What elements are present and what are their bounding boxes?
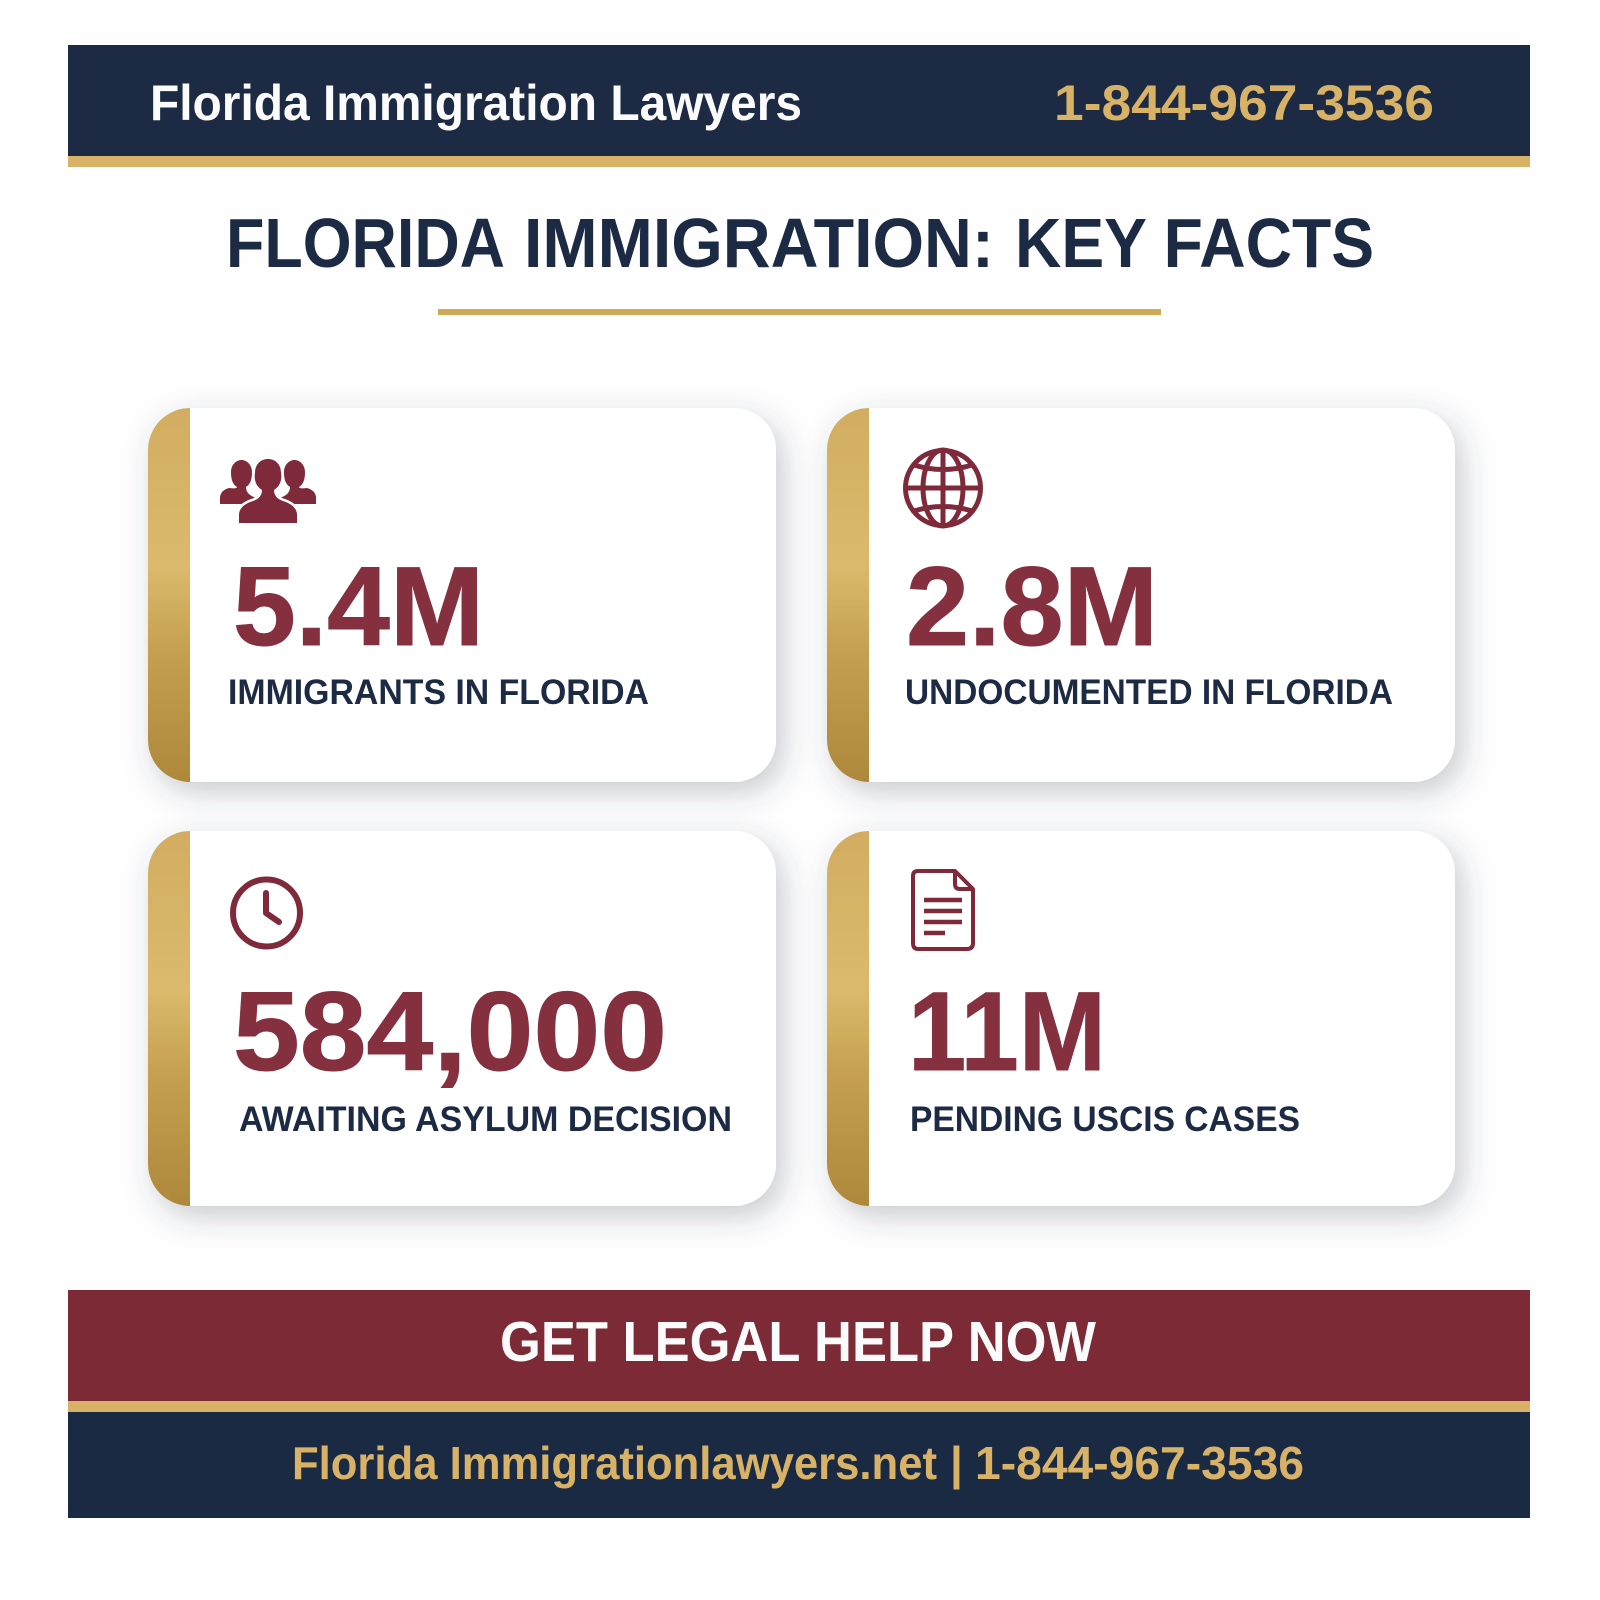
title underline [438,309,1161,315]
icon: document [913,871,973,949]
call to action banner [68,1290,1530,1401]
icon: globe [905,450,981,526]
stat value: 2.8M [906,544,1158,669]
stat value: 584,000 [233,969,667,1094]
stat label: UNDOCUMENTED IN FLORIDA [905,673,1393,712]
title: IMMIGRATION: [524,204,994,282]
firm name: Florida Immigration Lawyers [150,75,802,131]
title: KEY FACTS [1015,204,1374,282]
footer website and phone: 1-844-967-3536 [975,1437,1304,1489]
panel: pending USCIS cases [827,831,1455,1206]
stat value: 11M [908,969,1106,1094]
stat label: AWAITING ASYLUM DECISION [239,1100,732,1139]
header phone number: 1-844-967-3536 [1054,75,1434,131]
icon: clock [233,880,300,946]
stat label: IMMIGRANTS IN FLORIDA [228,673,649,712]
icon: group of people [220,459,316,523]
panel: awaiting asylum decision [148,831,776,1206]
panel: undocumented in Florida [827,408,1455,782]
header bar [68,45,1530,167]
stat value: 5.4M [233,544,484,669]
footer website and phone: Florida Immigrationlawyers.net [292,1437,937,1489]
call to action text: GET LEGAL HELP NOW [500,1310,1096,1374]
panel: immigrants in Florida [148,408,776,782]
title [226,204,1374,282]
footer website and phone: | [950,1437,963,1489]
footer website and phone [292,1437,1304,1489]
stat label: PENDING USCIS CASES [910,1100,1300,1139]
gold divider [68,1401,1530,1412]
title: FLORIDA [226,204,505,282]
footer bar [68,1412,1530,1518]
